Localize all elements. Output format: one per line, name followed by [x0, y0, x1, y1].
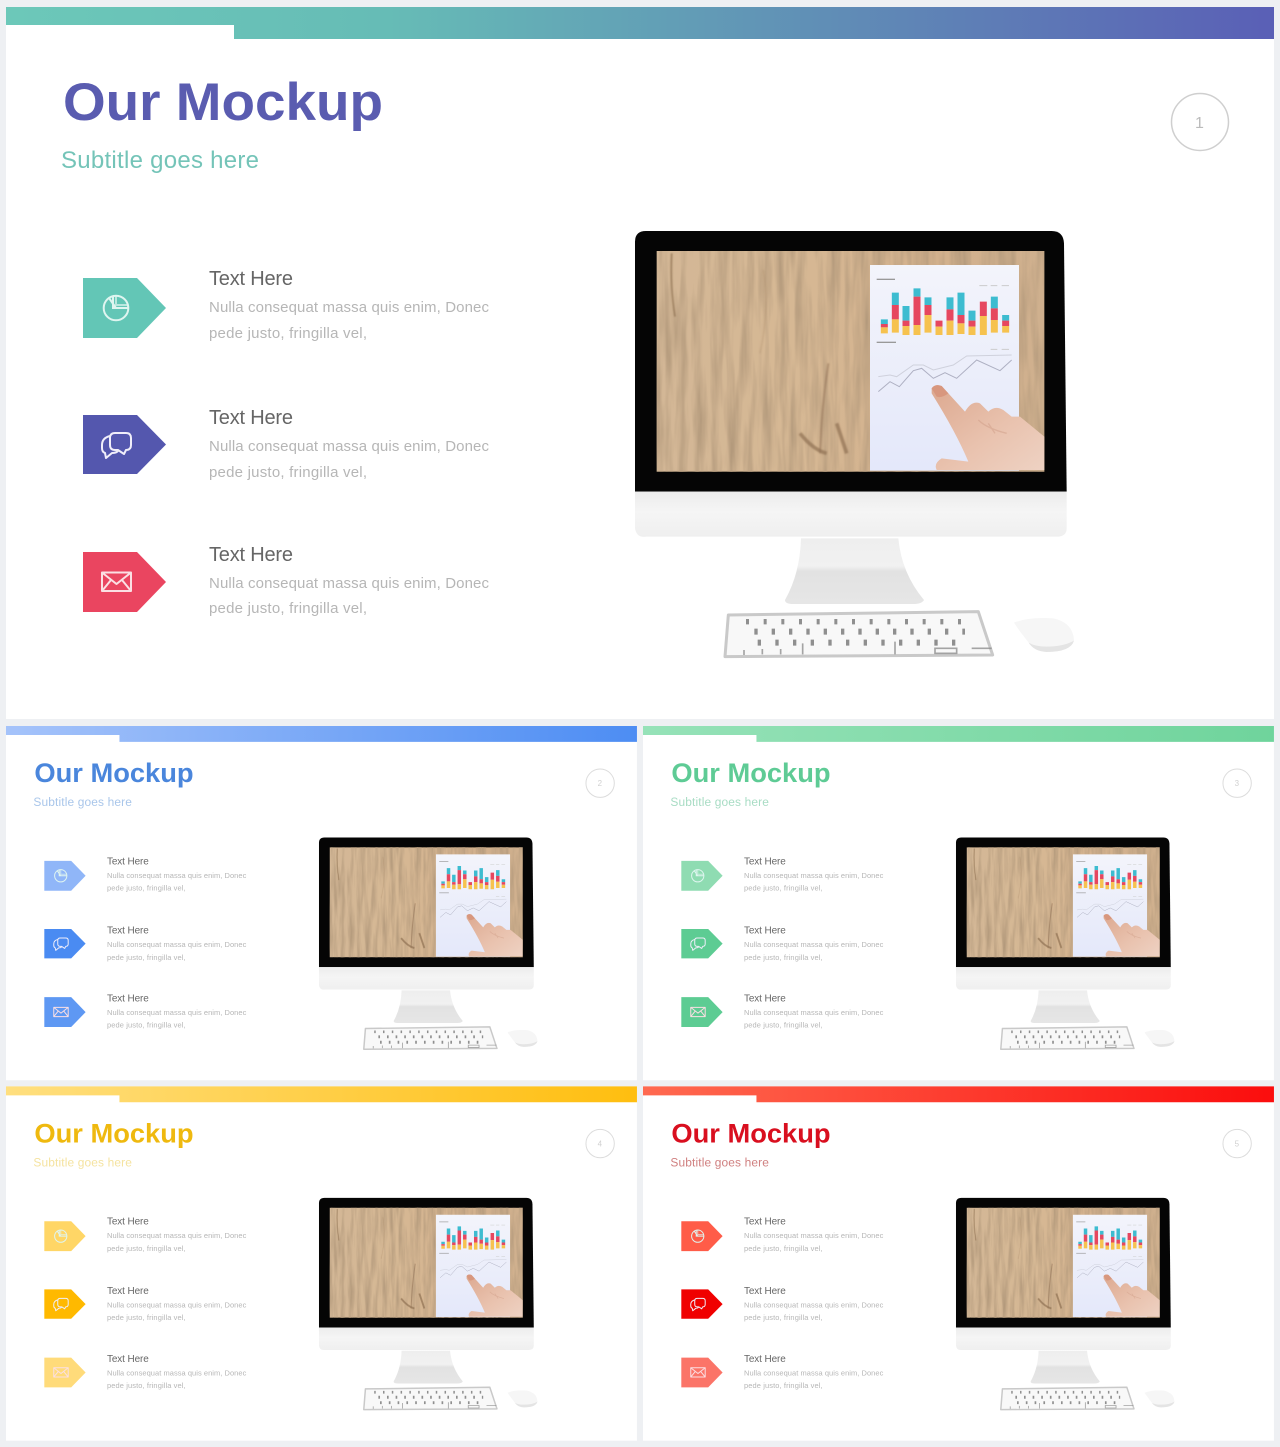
- page number badge: [1172, 94, 1228, 150]
- text block 1: Text Here: [744, 1217, 786, 1228]
- text block 1: Nulla consequat massa quis enim, Donec: [107, 871, 247, 880]
- text block 3: [107, 994, 247, 1030]
- text block 3: Nulla consequat massa quis enim, Donec: [744, 1368, 884, 1377]
- title: Our Mockup: [34, 1119, 194, 1149]
- text block 2: pede justo, fringilla vel,: [744, 1313, 823, 1322]
- arrow icon: mail: [83, 552, 166, 612]
- arrow icon: chat: [681, 929, 723, 958]
- text block 3: Nulla consequat massa quis enim, Donec: [209, 575, 490, 592]
- text block 3: [744, 994, 884, 1030]
- subtitle: Subtitle goes here: [670, 1155, 769, 1169]
- text block 2: [209, 407, 490, 481]
- title: Our Mockup: [671, 758, 831, 788]
- slide 2: blue: [6, 726, 637, 1080]
- arrow icon: mail: [44, 997, 86, 1027]
- text block 2: [107, 925, 247, 962]
- page number badge: [1223, 1129, 1251, 1158]
- arrow icon: pie chart: [44, 1221, 86, 1251]
- page number badge: 4: [598, 1140, 603, 1149]
- arrow icon: chat: [681, 1289, 723, 1319]
- text block 3: Text Here: [744, 994, 786, 1005]
- page number badge: [586, 1129, 614, 1158]
- header gradient bar: [643, 1086, 1274, 1102]
- text block 2: Text Here: [107, 925, 149, 936]
- text block 2: pede justo, fringilla vel,: [107, 953, 186, 962]
- text block 1: [744, 1217, 884, 1253]
- text block 1: pede justo, fringilla vel,: [107, 1244, 186, 1253]
- text block 3: [209, 544, 490, 617]
- arrow icon: mail: [681, 1358, 723, 1387]
- text block 2: pede justo, fringilla vel,: [107, 1313, 186, 1322]
- text block 1: Nulla consequat massa quis enim, Donec: [209, 299, 490, 316]
- title: Our Mockup: [63, 73, 383, 132]
- text block 2: Nulla consequat massa quis enim, Donec: [744, 1300, 884, 1309]
- text block 3: Text Here: [107, 994, 149, 1005]
- text block 2: [107, 1286, 247, 1322]
- text block 1: Text Here: [107, 856, 149, 867]
- text block 2: Text Here: [744, 925, 786, 936]
- text block 3: pede justo, fringilla vel,: [744, 1381, 823, 1390]
- text block 2: Nulla consequat massa quis enim, Donec: [107, 1300, 247, 1309]
- subtitle: Subtitle goes here: [33, 1155, 132, 1169]
- arrow icon: pie chart: [44, 861, 86, 891]
- text block 1: [107, 1217, 247, 1253]
- text block 1: pede justo, fringilla vel,: [744, 884, 823, 893]
- arrow icon: chat: [44, 1289, 86, 1319]
- text block 1: pede justo, fringilla vel,: [107, 884, 186, 893]
- page number badge: 1: [1195, 115, 1204, 132]
- desktop computer mockup: [635, 231, 1074, 657]
- text block 2: [744, 1286, 884, 1322]
- text block 2: Text Here: [209, 407, 293, 429]
- text block 3: Text Here: [209, 544, 293, 566]
- desktop computer mockup: [956, 837, 1174, 1049]
- title: Our Mockup: [671, 1119, 831, 1149]
- text block 1: pede justo, fringilla vel,: [744, 1244, 823, 1253]
- arrow icon: chat: [83, 415, 166, 474]
- desktop computer mockup: [319, 1198, 537, 1410]
- text block 2: Text Here: [744, 1286, 786, 1297]
- text block 3: Nulla consequat massa quis enim, Donec: [107, 1368, 247, 1377]
- text block 3: Nulla consequat massa quis enim, Donec: [744, 1008, 884, 1017]
- desktop computer mockup: [319, 837, 537, 1049]
- text block 1: pede justo, fringilla vel,: [209, 325, 367, 342]
- subtitle: Subtitle goes here: [33, 795, 132, 809]
- text block 3: Nulla consequat massa quis enim, Donec: [107, 1008, 247, 1017]
- text block 3: [107, 1354, 247, 1390]
- text block 1: [209, 268, 490, 342]
- text block 2: pede justo, fringilla vel,: [744, 953, 823, 962]
- text block 2: [744, 925, 884, 962]
- arrow icon: chat: [44, 929, 86, 958]
- slide 5: red: [643, 1086, 1274, 1441]
- slide 3: green: [643, 726, 1274, 1080]
- header gradient bar: [643, 726, 1274, 742]
- page number badge: 5: [1235, 1140, 1240, 1149]
- arrow icon: mail: [681, 997, 723, 1027]
- text block 2: Nulla consequat massa quis enim, Donec: [107, 940, 247, 949]
- header gradient bar: [6, 726, 637, 742]
- text block 1: Nulla consequat massa quis enim, Donec: [744, 871, 884, 880]
- text block 3: Text Here: [744, 1354, 786, 1365]
- text block 1: [107, 856, 247, 893]
- text block 3: [744, 1354, 884, 1390]
- text block 3: pede justo, fringilla vel,: [209, 600, 367, 617]
- arrow icon: pie chart: [681, 1221, 723, 1251]
- header gradient bar: [6, 7, 1274, 39]
- text block 3: pede justo, fringilla vel,: [744, 1021, 823, 1030]
- text block 1: Text Here: [107, 1217, 149, 1228]
- arrow icon: pie chart: [681, 861, 723, 891]
- subtitle: Subtitle goes here: [61, 147, 259, 174]
- page number badge: [586, 769, 614, 797]
- text block 1: [744, 856, 884, 893]
- text block 2: Nulla consequat massa quis enim, Donec: [744, 940, 884, 949]
- text block 1: Text Here: [209, 268, 293, 290]
- slide 1: teal and purple: [6, 7, 1274, 719]
- text block 3: pede justo, fringilla vel,: [107, 1381, 186, 1390]
- text block 2: Nulla consequat massa quis enim, Donec: [209, 438, 490, 455]
- desktop computer mockup: [956, 1198, 1174, 1410]
- text block 3: pede justo, fringilla vel,: [107, 1021, 186, 1030]
- arrow icon: mail: [44, 1358, 86, 1387]
- page number badge: 2: [598, 779, 603, 788]
- arrow icon: pie chart: [83, 278, 166, 338]
- page number badge: [1223, 769, 1251, 797]
- text block 2: Text Here: [107, 1286, 149, 1297]
- subtitle: Subtitle goes here: [670, 795, 769, 809]
- text block 1: Nulla consequat massa quis enim, Donec: [744, 1231, 884, 1240]
- text block 1: Text Here: [744, 856, 786, 867]
- text block 1: Nulla consequat massa quis enim, Donec: [107, 1231, 247, 1240]
- text block 3: Text Here: [107, 1354, 149, 1365]
- header gradient bar: [6, 1086, 637, 1102]
- slide 4: yellow: [6, 1086, 637, 1441]
- page number badge: 3: [1235, 779, 1240, 788]
- title: Our Mockup: [34, 758, 194, 788]
- text block 2: pede justo, fringilla vel,: [209, 464, 367, 481]
